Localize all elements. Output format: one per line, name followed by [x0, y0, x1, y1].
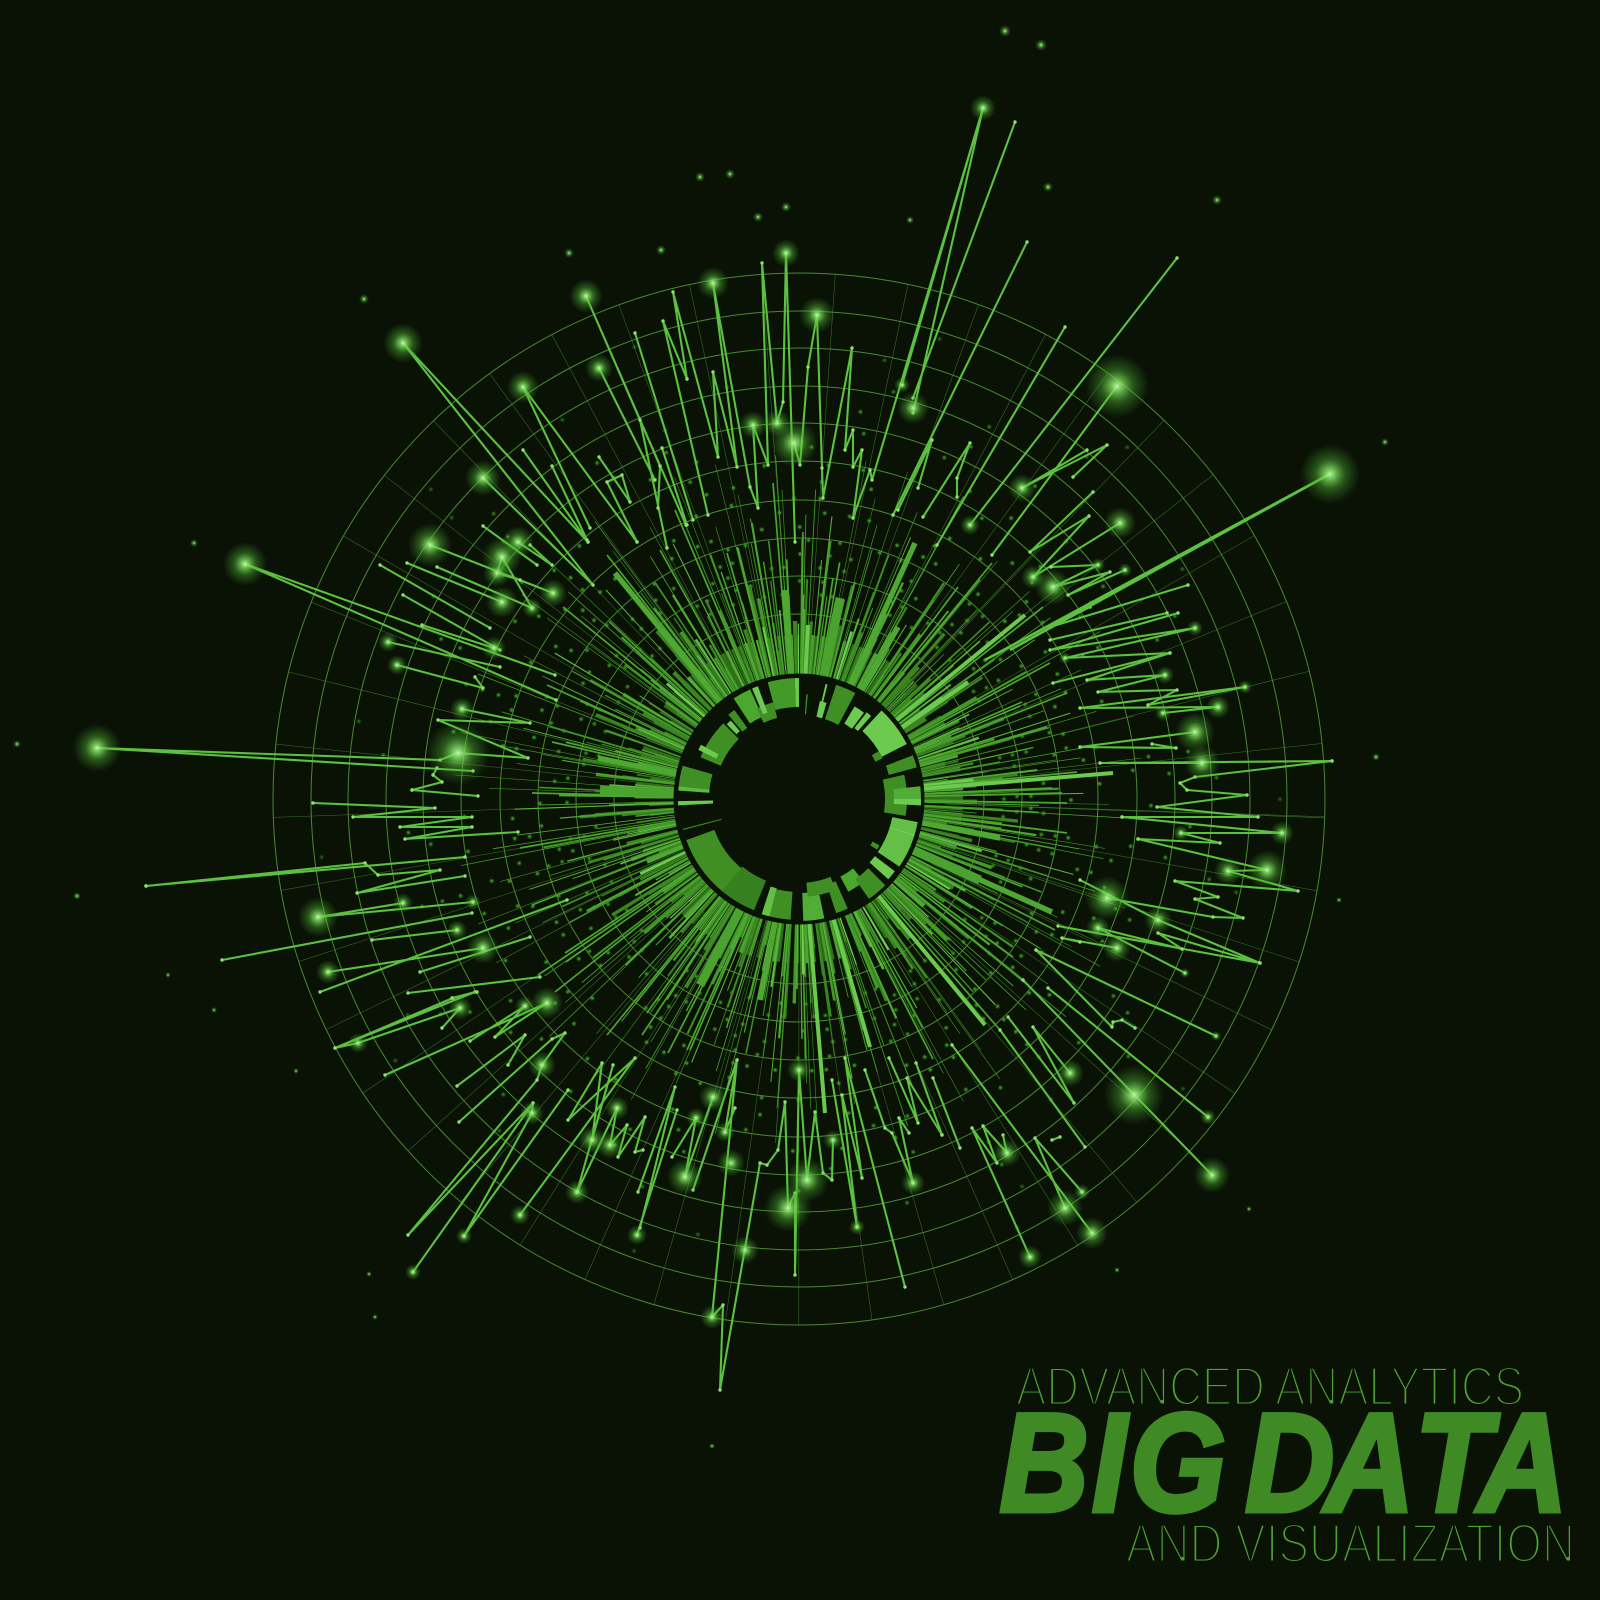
- spikes: bottom sector: [672, 1058, 1030, 1390]
- long radial rays: [520, 483, 1113, 1113]
- glowing data nodes: [13, 25, 1389, 1449]
- spikes: upper right sector: [898, 258, 1177, 595]
- title: big data: BIG DATA: [1000, 1385, 1567, 1541]
- polar grid: [273, 273, 1325, 1325]
- spikes: right sector: [1050, 585, 1332, 843]
- spikes: upper left sector: [380, 296, 693, 650]
- spikes: lower left sector: [335, 992, 677, 1272]
- spikes: lower right sector: [952, 839, 1298, 1233]
- spike: far right tip: [985, 474, 1330, 660]
- spikes: top sector: [663, 108, 1027, 542]
- spikes: left sector: [97, 564, 567, 998]
- central ring chart: [643, 643, 955, 955]
- central ray burst: [484, 484, 1114, 1114]
- scattered data particles: [182, 182, 1416, 1416]
- data spikes and zigzags: [97, 108, 1332, 1390]
